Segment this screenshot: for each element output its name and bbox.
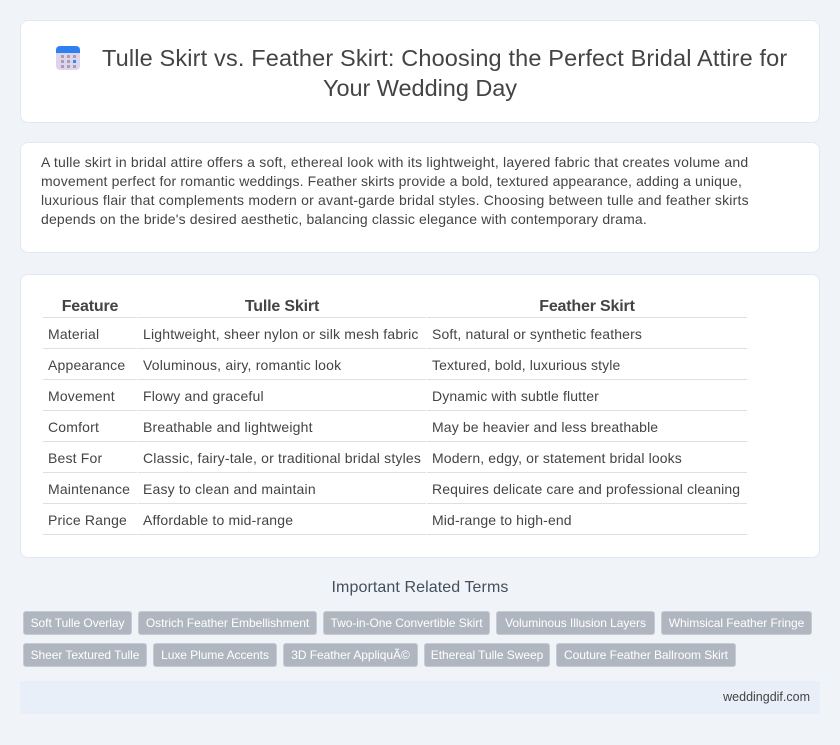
tag: 3D Feather Appliqué: 3D Feather AppliquÃ© — [291, 648, 410, 662]
row: Maintenance: Maintenance — [48, 481, 130, 497]
tag: Luxe Plume Accents: Luxe Plume Accents — [161, 648, 269, 662]
row: Price Range: Price Range — [48, 512, 127, 528]
tag: Ostrich Feather Embellishment — [138, 611, 317, 635]
row: Price Range: Affordable to mid-range — [143, 512, 293, 528]
text block: intro paragraph: A tulle skirt in bridal attire offers a soft, ethereal look with its lightweight, layered fabric that creates volume and — [41, 154, 748, 170]
tag: Couture Feather Ballroom Skirt — [556, 643, 736, 667]
text block: intro paragraph: depends on the bride's desired aesthetic, balancing classic elegance with contemporary drama. — [41, 211, 647, 227]
row: Best For: Classic, fairy-tale, or traditional bridal styles — [143, 450, 421, 466]
table header: Tulle Skirt: Tulle Skirt — [245, 298, 319, 315]
tag: Ethereal Tulle Sweep — [424, 643, 550, 667]
row: Movement: Movement — [48, 388, 115, 404]
row: Best For: Modern, edgy, or statement bridal looks — [432, 450, 682, 466]
row: Movement: Flowy and graceful — [143, 388, 264, 404]
tag: 3D Feather Appliqué — [283, 643, 418, 667]
row: Appearance: Textured, bold, luxurious style — [432, 357, 620, 373]
footer bar — [20, 681, 820, 714]
tag: Soft Tulle Overlay — [23, 611, 132, 635]
text block: intro paragraph — [41, 154, 749, 227]
row: Maintenance — [48, 481, 740, 497]
tag: Whimsical Feather Fringe — [661, 611, 812, 635]
row: Price Range — [48, 512, 572, 528]
text block: intro paragraph: movement perfect for romantic weddings. Feather skirts provide a bold, textured appearance, adding a unique, — [41, 173, 742, 189]
row: Maintenance: Easy to clean and maintain — [143, 481, 316, 497]
footer source text: weddingdif.com — [723, 690, 810, 704]
tag: Sheer Textured Tulle: Sheer Textured Tulle — [31, 648, 139, 662]
row: Material: Soft, natural or synthetic feathers — [432, 326, 642, 342]
row: Material: Material — [48, 326, 99, 342]
tag: Ostrich Feather Embellishment: Ostrich Feather Embellishment — [146, 616, 309, 630]
table header: Feature: Feature — [62, 298, 118, 315]
tag: Voluminous Illusion Layers: Voluminous Illusion Layers — [505, 616, 646, 630]
row: Material: Lightweight, sheer nylon or silk mesh fabric — [143, 326, 419, 342]
panel: title card — [20, 20, 820, 123]
row: Appearance: Voluminous, airy, romantic look — [143, 357, 341, 373]
row: Comfort: Breathable and lightweight — [143, 419, 313, 435]
row: Best For — [48, 450, 682, 466]
row: Maintenance: Requires delicate care and professional cleaning — [432, 481, 740, 497]
row: Price Range: Mid-range to high-end — [432, 512, 572, 528]
tag: Two-in-One Convertible Skirt — [323, 611, 490, 635]
row: Movement: Dynamic with subtle flutter — [432, 388, 599, 404]
tag: Ethereal Tulle Sweep: Ethereal Tulle Sweep — [431, 648, 543, 662]
heading: title line two: Your Wedding Day — [323, 75, 517, 101]
row: Appearance — [48, 357, 620, 373]
tag: Whimsical Feather Fringe: Whimsical Feather Fringe — [669, 616, 804, 630]
heading: title line one: Tulle Skirt vs. Feather Skirt: Choosing the Perfect Bridal Attire for — [102, 45, 787, 71]
tag: Sheer Textured Tulle — [23, 643, 147, 667]
row: Comfort — [48, 419, 658, 435]
icon: calendar — [56, 46, 80, 70]
table header: Feather Skirt: Feather Skirt — [539, 298, 635, 315]
tag: Couture Feather Ballroom Skirt: Couture Feather Ballroom Skirt — [564, 648, 728, 662]
row: Best For: Best For — [48, 450, 102, 466]
row: Comfort: May be heavier and less breathable — [432, 419, 658, 435]
panel: intro card — [20, 142, 820, 253]
row: Movement — [48, 388, 599, 404]
text block: intro paragraph: luxurious flair that complements modern or avant-garde bridal styles. Choosing between tulle and feather skirts — [41, 192, 749, 208]
row: Comfort: Comfort — [48, 419, 99, 435]
row: Material — [48, 326, 642, 342]
tag: Soft Tulle Overlay: Soft Tulle Overlay — [31, 616, 124, 630]
tag: Luxe Plume Accents — [153, 643, 277, 667]
tag: Voluminous Illusion Layers — [496, 611, 655, 635]
heading: Important Related Terms: Important Related Terms — [332, 579, 508, 596]
panel: comparison table — [20, 274, 820, 558]
tag: Two-in-One Convertible Skirt: Two-in-One Convertible Skirt — [330, 616, 482, 630]
row: Appearance: Appearance — [48, 357, 125, 373]
